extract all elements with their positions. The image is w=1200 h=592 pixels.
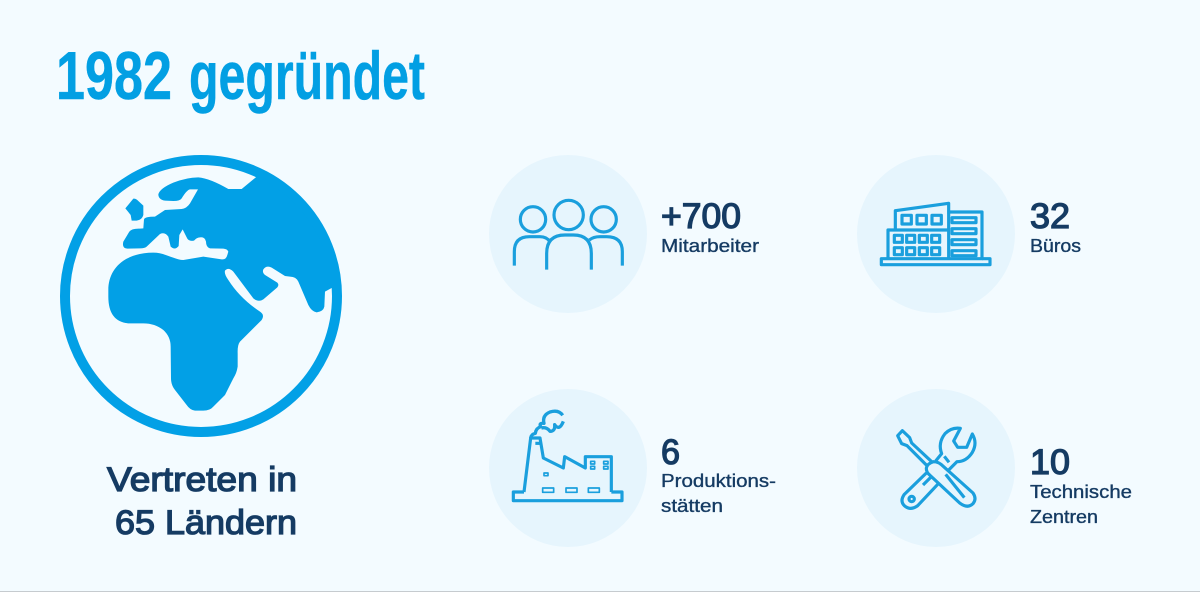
stat: employees: Mitarbeiter xyxy=(661,236,759,256)
panel: globe and countries xyxy=(65,160,337,542)
title: 1982 xyxy=(56,38,172,114)
stat: technical centres xyxy=(1030,443,1132,527)
panel: technical centres xyxy=(857,389,1132,547)
caption: countries: Vertreten in xyxy=(107,461,297,499)
icon: tools xyxy=(898,428,975,508)
panel: employees xyxy=(489,155,759,313)
stat: employees: +700 xyxy=(661,197,741,236)
stat: technical centres: Zentren xyxy=(1030,507,1098,527)
stat: offices: Büros xyxy=(1030,236,1081,256)
icon: factory xyxy=(513,411,622,501)
stat: production sites: Produktions- xyxy=(661,471,776,491)
title xyxy=(56,38,425,114)
title: gegründet xyxy=(189,38,425,114)
panel: offices xyxy=(857,155,1081,313)
caption: countries xyxy=(107,461,297,542)
stat: employees xyxy=(661,197,759,256)
icon: people xyxy=(514,200,622,270)
stat: technical centres: 10 xyxy=(1030,443,1070,482)
panel: production sites xyxy=(489,389,776,547)
icon: globe xyxy=(65,160,337,432)
caption: countries: 65 Ländern xyxy=(115,504,297,542)
stat: production sites: stätten xyxy=(661,496,723,516)
stat: production sites xyxy=(661,433,776,516)
stat: technical centres: Technische xyxy=(1030,482,1132,502)
stat: offices: 32 xyxy=(1030,197,1070,236)
stat: offices xyxy=(1030,197,1081,256)
icon: building xyxy=(881,203,990,265)
stat: production sites: 6 xyxy=(661,433,680,472)
